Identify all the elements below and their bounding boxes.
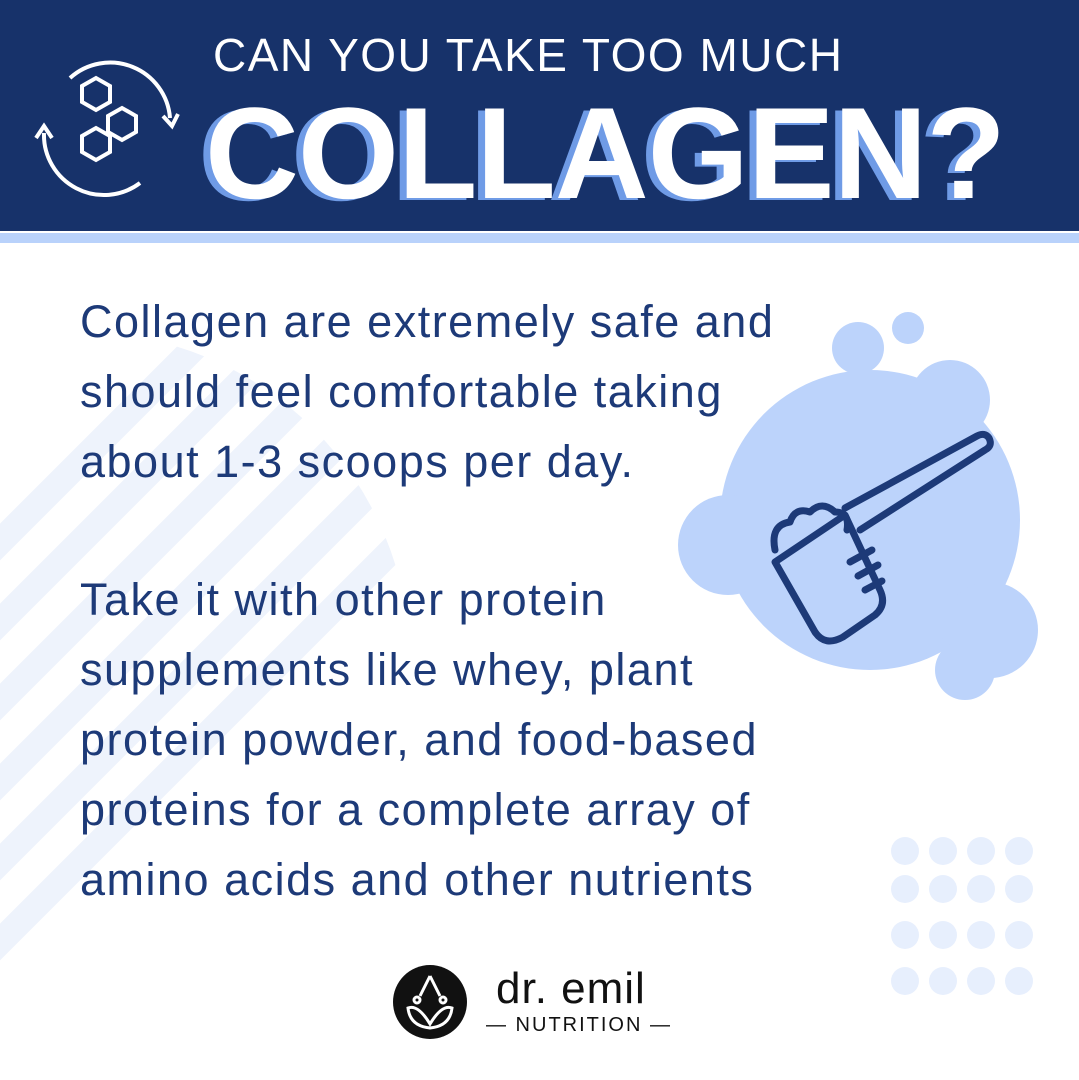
logo [393,964,672,1039]
paragraph 2: Take it with other protein supplements like whey, plant protein powder, and food-based proteins for a complete array of amino acids and other nutrients [80,574,758,905]
logo text: dr. emil [496,964,646,1013]
background decoration [0,346,396,960]
header banner [0,0,1079,231]
paragraph 1: Collagen are extremely safe and should feel comfortable taking about 1-3 scoops per day. [80,296,774,487]
dot grid [891,837,1033,995]
icon: scoop in bubbles [678,312,1038,700]
logo subtext: — NUTRITION — [486,1014,672,1036]
header strip [0,233,1079,243]
header title: COLLAGEN? [205,80,1005,226]
logo icon [393,965,467,1039]
icon: collagen cycle [34,60,180,197]
header subtitle: CAN YOU TAKE TOO MUCH [213,29,843,81]
